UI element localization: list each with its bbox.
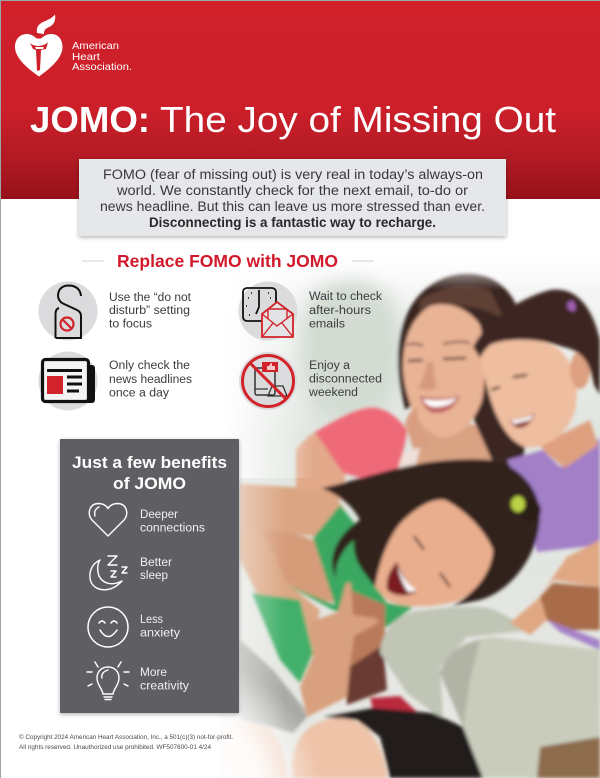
title: JOMO: [30,99,150,140]
logo wordmark: Heart [72,51,100,63]
text: do not disturb: Use the “do not [109,292,192,304]
icon: newspaper [38,352,98,410]
icon: moon with z letters [90,556,127,590]
text: do not disturb: disturb” setting [109,305,190,317]
text: more creativity: More [140,667,167,679]
text: disconnected weekend [308,360,382,399]
intro text box: world. We constantly check for the next email, to-do or [116,183,469,198]
logo wordmark [72,40,132,73]
text: less anxiety: anxiety [140,628,180,640]
text: more creativity [140,667,189,692]
copyright footer: © Copyright 2024 American Heart Association, Inc., a 501(c)(3) not-for-profit. [19,733,233,741]
text: deeper connections [140,509,205,534]
photo: mother with two laughing daughters [217,253,600,778]
icon: heart [89,504,127,536]
text: better sleep: Better [140,557,172,569]
icon: light bulb [87,662,129,700]
green shirt [285,505,413,627]
text: news headlines: once a day [109,388,169,400]
hand with pointing finger [300,583,379,717]
icon: clock and envelope [238,282,298,340]
text: better sleep: sleep [140,570,168,582]
title [30,99,556,140]
logo: American Heart Association [15,14,132,76]
text: disconnected weekend: weekend [308,387,358,399]
panel heading: Just a few benefits [72,454,227,472]
light trousers [380,607,533,720]
intro text box: FOMO (fear of missing out) is very real in today’s always-on [103,167,483,182]
text: after-hours emails [309,291,382,330]
text: after-hours emails: emails [309,318,345,330]
text: news headlines [109,360,192,400]
text: deeper connections: Deeper [140,509,178,521]
black shorts [323,708,483,778]
icon: do not disturb door hanger [38,282,98,340]
bottom girl hair [322,459,540,606]
copyright footer [19,733,233,751]
text: less anxiety: Less [140,614,163,626]
logo wordmark: Association. [72,61,132,73]
text: better sleep [140,557,172,582]
text: after-hours emails: Wait to check [309,291,382,303]
right side hands [510,540,600,635]
title: The Joy of Missing Out [160,99,556,140]
grey shorts [240,640,307,733]
icon: no phone [239,352,297,410]
text: disconnected weekend: disconnected [309,374,382,386]
text: more creativity: creativity [140,680,189,692]
panel heading [72,454,227,493]
text: deeper connections: connections [140,522,205,534]
bottom girl face [375,500,493,606]
text: less anxiety [140,614,180,640]
copyright footer: All rights reserved. Unauthorized use prohibited. WF507600-01 4/24 [19,744,211,751]
text: disconnected weekend: Enjoy a [309,360,351,372]
text: after-hours emails: after-hours [309,305,371,317]
heading: Replace FOMO with JOMO: Replace FOMO with JOMO [117,251,338,271]
text: do not disturb [109,292,192,330]
arms of the girls [240,484,345,537]
text: news headlines: Only check the [109,360,190,372]
panel: benefits of JOMO [60,439,239,713]
panel heading: of JOMO [113,475,186,493]
knees [292,718,387,778]
intro text box: Disconnecting is a fantastic way to recharge. [149,215,436,230]
second fist and shadow [350,590,385,685]
text: do not disturb: to focus [109,318,152,330]
logo heart with torch [15,14,62,76]
text: news headlines: news headlines [109,374,192,386]
icon: smiling face [88,607,128,647]
intro text box [79,159,506,236]
red header band [1,1,600,199]
logo wordmark: American [72,40,119,52]
intro text box: news headline. But this can leave us more stressed than ever. [100,199,485,214]
